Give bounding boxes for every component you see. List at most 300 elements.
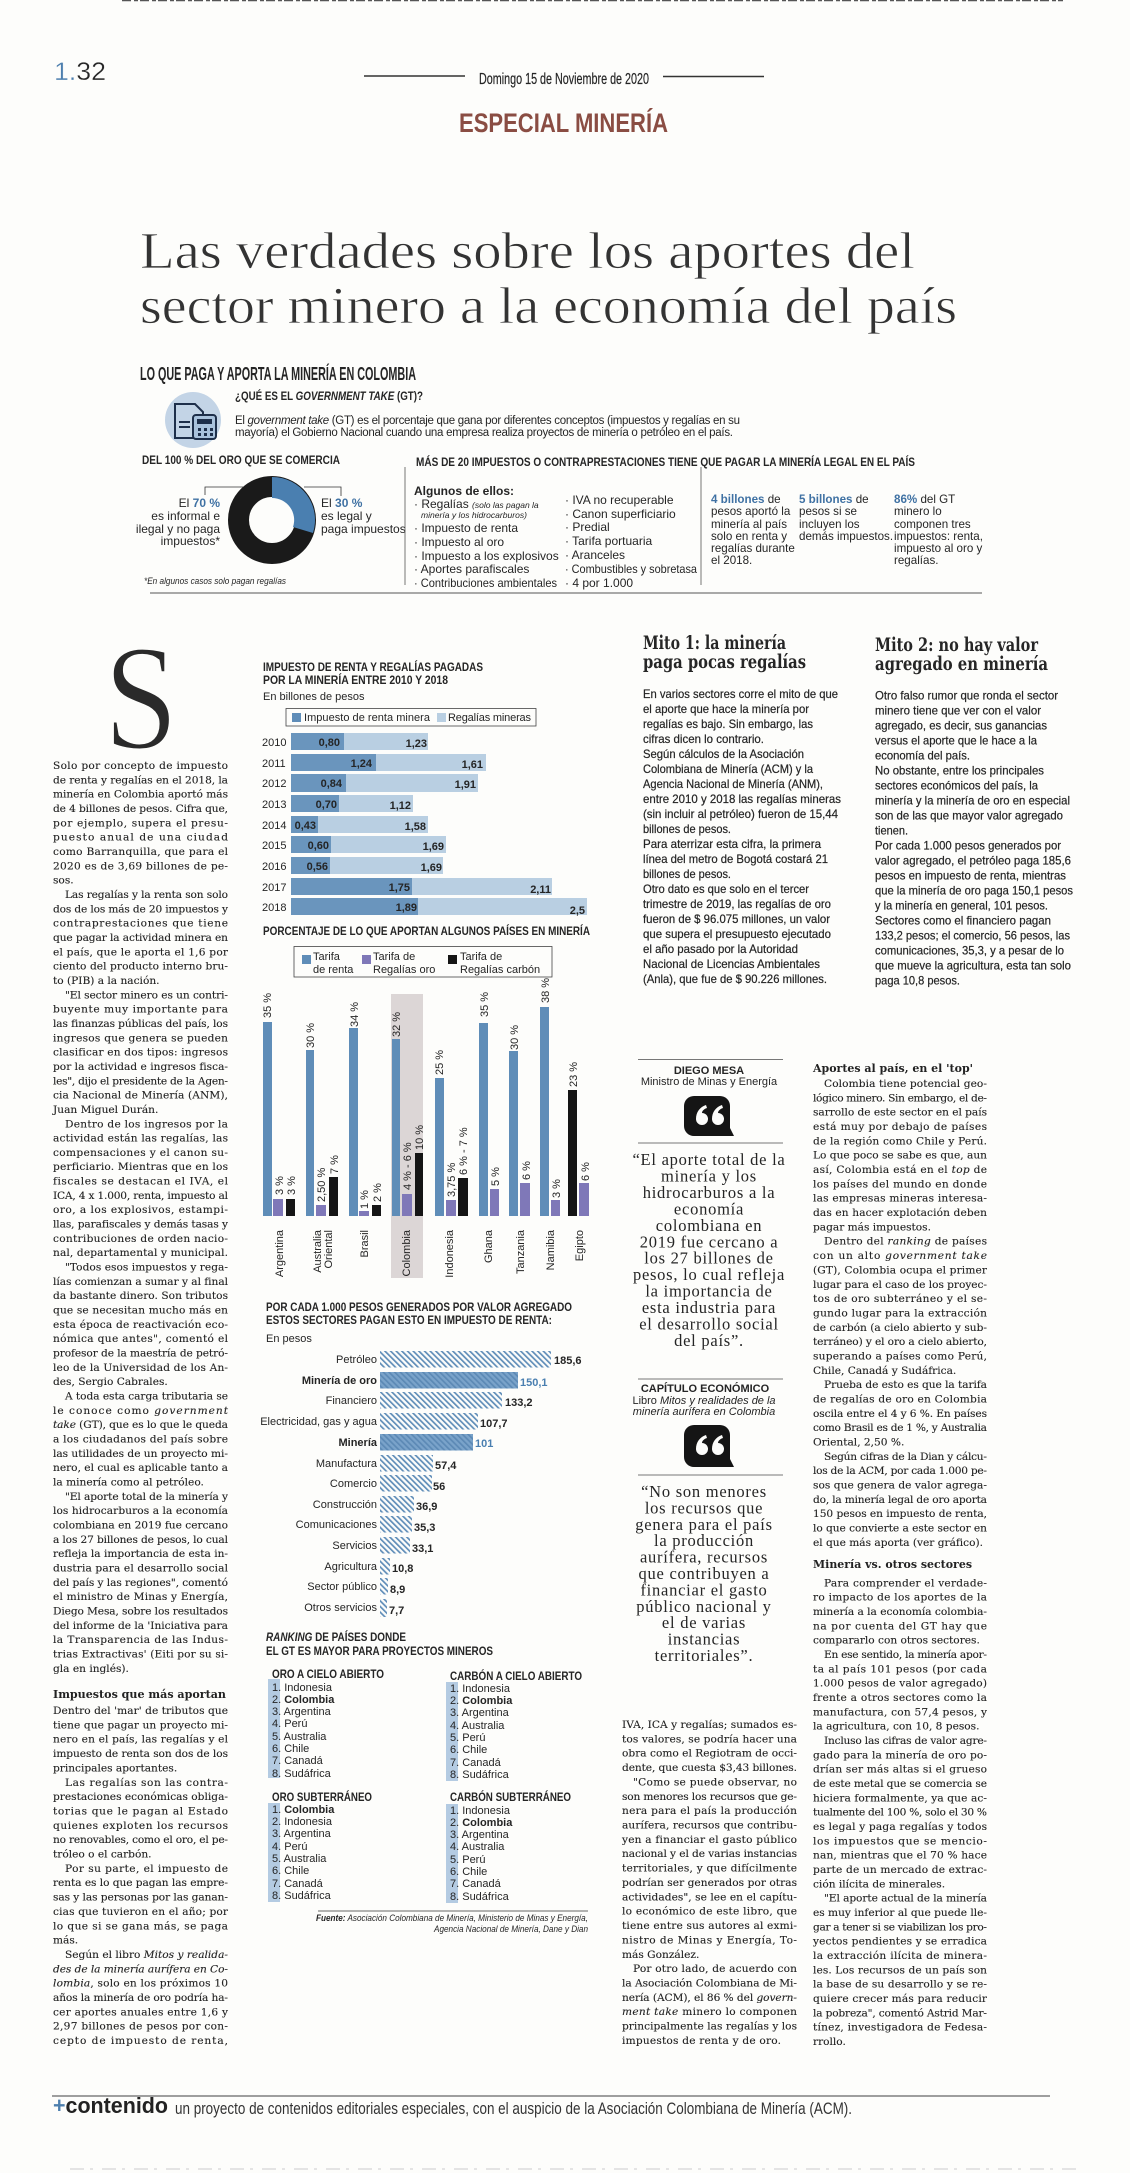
key figures: solo en renta y: [711, 530, 787, 543]
country labels: Indonesia: [444, 1229, 456, 1278]
key figures: minero lo: [894, 505, 942, 518]
article column 1: trias Extractivas' (Eiti por su si-: [53, 1648, 228, 1660]
legend: Regalías mineras: [448, 712, 532, 724]
country labels: [274, 1229, 586, 1278]
article column 4: quiere crecer más para reducir: [813, 1993, 988, 2005]
panel: myth 1: billones de pesos.: [643, 867, 731, 881]
article column 3: aurífera, recursos que contribu-: [622, 1820, 797, 1832]
bars by year: 2013: [262, 799, 286, 811]
panel: myth 1: cifras dicen lo contrario.: [643, 732, 764, 746]
article column 1: nal, departamental y municipal.: [53, 1247, 228, 1259]
article column 1: 2,97 billones de pesos por con-: [53, 2021, 228, 2033]
callout: quote by Diego Mesa: minería y los: [661, 1166, 757, 1186]
percentage labels: 30 %: [305, 1023, 317, 1048]
taxes list section: · Combustibles y sobretasa: [565, 562, 697, 576]
panel: myth 2: Otro falso rumor que ronda el sector: [875, 688, 1058, 702]
key figures: regalías.: [894, 554, 938, 567]
article column 1: sos.: [53, 875, 74, 887]
bars by year: 1,23: [406, 738, 427, 750]
legend: Impuesto de renta minera: [304, 712, 431, 724]
bars by year: 0,70: [316, 799, 337, 811]
article column 1: Por su parte, el impuesto de: [65, 1863, 228, 1875]
percentage labels: 3 %: [274, 1176, 286, 1195]
panel: myth 1: En varios sectores corre el mito de que: [643, 687, 838, 701]
panel: myth 1: fueron de $ 96.075 millones, un valor: [643, 912, 830, 926]
article column 1: dos de los más de 20 impuestos y: [53, 903, 228, 915]
sector labels and values: 33,1: [412, 1543, 433, 1555]
ranking: underground coal: 3. Argentina: [450, 1829, 510, 1841]
article column 3: tiene entre sus autores al exmi-: [622, 1920, 797, 1932]
panel: myth 1: línea del metro de Bogotá costará 21: [643, 852, 828, 866]
article column 3: tos valores, se podría hacer una: [622, 1733, 798, 1745]
taxes list section: · IVA no recuperable: [565, 493, 674, 507]
bars by year: 2015: [262, 840, 286, 852]
ranking: open-pit coal: 3. Argentina: [450, 1707, 510, 1719]
percentage labels: 32 %: [391, 1012, 403, 1037]
article column 4: sos que genera de valor agrega-: [813, 1480, 987, 1492]
panel: myth 2: minero tiene que ver con el valor: [875, 703, 1041, 717]
article column 1: clasificar en dos tipos: ingresos: [53, 1047, 228, 1059]
icon: quotation bubble: [684, 1425, 734, 1467]
key figures: componen tres: [894, 518, 971, 531]
callout: quote from economic chapter: la producción: [654, 1531, 754, 1550]
footer: sponsor line: +contenido: [53, 2093, 168, 2118]
ranking: underground gold: 1. Colombia: [272, 1804, 335, 1816]
icon: quotation bubble: [684, 1096, 734, 1136]
callout: quote by Diego Mesa: del país”.: [674, 1331, 744, 1350]
percentage labels: 3 %: [286, 1176, 298, 1195]
panel: myth 1: (sin incluir al petróleo) fueron de 15,44: [643, 807, 838, 821]
ranking: open-pit gold: 7. Canadá: [272, 1755, 324, 1767]
article column 4: superando a países como Perú,: [813, 1350, 987, 1362]
title: [140, 223, 957, 335]
article column 4: manufactura, con 57,4 pesos, y: [813, 1706, 987, 1718]
taxes list section: [405, 454, 915, 590]
panel: myth 1: Nacional de Licencias Ambientales: [643, 957, 820, 971]
ranking: open-pit coal: 8. Sudáfrica: [450, 1769, 510, 1781]
article column 1: que pagar la actividad minera en: [53, 932, 228, 944]
ranking: open-pit coal: 5. Perú: [450, 1732, 485, 1744]
article column 1: Dentro del 'mar' de tributos que: [53, 1705, 228, 1717]
article column 4: la base de su desarrollo y se re-: [813, 1979, 987, 1991]
sector labels and values: 56: [433, 1481, 445, 1493]
panel: myth 2: paga 10,8 pesos.: [875, 973, 960, 987]
callout: quote from economic chapter: los recursos que: [645, 1498, 763, 1517]
panel: myth 2: versus el aporte que le hace a la: [875, 733, 1037, 747]
article column 1: lías comienzan a sumar y al final: [53, 1276, 229, 1288]
article column 3: actividades", se lee en el capítu-: [622, 1891, 797, 1903]
ranking: open-pit coal: 6. Chile: [450, 1744, 487, 1756]
percentage labels: 1 %: [359, 1190, 371, 1209]
panel: myth 2: No obstante, entre los principales: [875, 763, 1044, 777]
callout: quote from economic chapter: el de varias: [662, 1613, 746, 1632]
percentage labels: 25 %: [434, 1050, 446, 1075]
panel: myth 2: que mueve la agricultura, esta tan solo: [875, 958, 1071, 972]
article column 4: Lo que poco se sabe es que, aun: [813, 1150, 987, 1162]
article column 1: ICA, 4 x 1.000, renta, impuesto al: [53, 1190, 229, 1202]
article column 3: impuestos de renta y de oro.: [622, 2035, 781, 2047]
panel: myth 2: pesos en impuesto de renta, mientras: [875, 868, 1066, 882]
article column 1: ingresos que genera se pueden: [53, 1032, 228, 1044]
panel: percentage by country chart: [262, 923, 592, 1278]
article column 4: frente a otros sectores como la: [813, 1692, 988, 1704]
article column 1: del país y las regiones", comentó: [53, 1577, 228, 1589]
sector labels and values: 185,6: [554, 1355, 582, 1367]
panel: myth 1: Otro dato es que solo en el tercer: [643, 882, 809, 896]
bars by year: 1,24: [351, 758, 373, 770]
article column 1: leo de la Universidad de los An-: [53, 1362, 228, 1374]
article column 4: yectos pendientes y se erradica: [812, 1936, 988, 1948]
title: sector minero a la economía del país: [140, 278, 957, 335]
legend: [286, 708, 536, 726]
panel: ranking of countries: EL GT ES MAYOR PARA PROYECTOS MINEROS: [266, 1644, 493, 1658]
ranking: underground gold: 5. Australia: [272, 1853, 327, 1865]
article column 4: las empresas mineras interesa-: [813, 1193, 987, 1205]
taxes list section: · Regalías (solo las pagan la: [414, 497, 539, 511]
bars by year: 2018: [262, 902, 286, 914]
callout: quote by Diego Mesa: pesos, lo cual refleja: [633, 1265, 785, 1284]
ranking: underground gold: ORO SUBTERRÁNEO: [272, 1789, 372, 1804]
page number: 1.32: [54, 58, 106, 86]
article column 4: es legal y paga regalías y todos: [813, 1821, 987, 1833]
sector labels and values: 150,1: [520, 1377, 548, 1389]
panel: myth 1: Para aterrizar esta cifra, la primera: [643, 837, 821, 851]
title: Las verdades sobre los aportes del: [140, 223, 915, 280]
article column 1: lo que si se gana más, se paga: [53, 1920, 229, 1932]
article column 1: to (PIB) a la nación.: [53, 975, 160, 987]
panel: income tax and royalties bar chart: En billones de pesos: [263, 691, 365, 703]
key figures: el 2018.: [711, 554, 752, 567]
country labels: Egipto: [574, 1230, 586, 1261]
panel: income tax per 1000 pesos of value added: En pesos: [266, 1333, 312, 1345]
Colombia highlight: [391, 994, 423, 1278]
taxes list section: · Canon superficiario: [565, 507, 676, 521]
article column 4: Dentro del ranking de países: [824, 1236, 987, 1248]
article column 1: "Todos esos impuestos y rega-: [65, 1262, 228, 1274]
sector labels and values: Petróleo: [336, 1354, 377, 1366]
panel: myth 2: economía del país.: [875, 748, 970, 762]
article column 3: lo económico de este libro, que: [622, 1906, 797, 1918]
bars by year: 2011: [262, 758, 286, 770]
sector labels and values: Electricidad, gas y agua: [260, 1416, 378, 1428]
drop cap: S: [104, 615, 178, 781]
callout: quote by Diego Mesa: los 27 billones de: [644, 1249, 774, 1268]
article column 3: ment take minero lo componen: [622, 2006, 797, 2018]
article column 4: parte de un mercado de extrac-: [813, 1864, 987, 1876]
percentage labels: 23 %: [568, 1062, 580, 1087]
sector labels and values: [260, 1354, 582, 1617]
key figures: minería al país: [711, 518, 787, 531]
article column 1: torias que le pagan al Estado: [53, 1806, 228, 1818]
panel: myth 2: son de las que mayor valor agregado: [875, 808, 1063, 822]
article column 1: prestaciones económicas obliga-: [53, 1791, 228, 1803]
panel: myth 2: [875, 634, 1073, 987]
percentage labels: 4 % - 6 %: [402, 1142, 414, 1190]
article column 1: cias que tuvieron en el año; por: [53, 1906, 229, 1918]
article column 1: colombiana en 2019 fue cercano: [53, 1520, 228, 1532]
article column 4: [812, 1061, 988, 2048]
panel: myth 2: que la minería de oro paga 150,1 pesos: [875, 883, 1073, 897]
bars by year: 1,12: [390, 800, 411, 812]
bars by year: 2017: [262, 882, 286, 894]
article column 4: con un alto government take: [813, 1250, 987, 1262]
article column 4: les. Los recursos de un país son: [813, 1964, 987, 1976]
sector labels and values: Construcción: [313, 1499, 377, 1511]
article column 4: "El aporte actual de la minería: [824, 1893, 988, 1905]
callout: quote by Diego Mesa: “El aporte total de la: [632, 1150, 786, 1169]
bars by year: 1,61: [462, 759, 483, 771]
percentage labels: 3 %: [551, 1179, 563, 1198]
panel: income tax and royalties bar chart: POR LA MINERÍA ENTRE 2010 Y 2018: [263, 672, 448, 687]
subheading: mining vs other sectors: Minería vs. otros sectores: [813, 1557, 972, 1571]
key figures: impuestos: renta,: [894, 530, 983, 543]
article column 1: puesto anual de una ciudad: [53, 832, 228, 844]
percentage labels: 6 % - 7 %: [458, 1127, 470, 1175]
article column 1: nero, el cual es aplicable tanto a: [53, 1462, 229, 1474]
ranking: underground coal: 2. Colombia: [450, 1817, 513, 1829]
article column 4: los impuestos que se mencio-: [813, 1835, 987, 1847]
panel: myth 2: sectores económicos del país, la: [875, 778, 1038, 792]
government take definition: El government take (GT) es el porcentaje que gana por diferentes conceptos (impuestos y regalías en su: [235, 415, 740, 427]
article column 4: (GT), Colombia ocupa el primer: [813, 1264, 988, 1276]
panel: ranking of countries: RANKING DE PAÍSES DONDE: [266, 1629, 406, 1644]
source note: Agencia Nacional de Minería, Dane y Dian: [433, 1924, 588, 1935]
article column 1: esta época de reactivación eco-: [53, 1319, 228, 1331]
percentage labels: 3,75 %: [446, 1163, 458, 1197]
ranking: underground gold: 3. Argentina: [272, 1828, 332, 1840]
article column 3: nería (ACM), el 86 % del govern-: [622, 1992, 797, 2004]
article column 4: lugar para el caso de los proyec-: [813, 1279, 987, 1291]
bars by year: 2012: [262, 778, 286, 790]
article column 4: nan, mientras que el 70 % hace: [813, 1850, 987, 1862]
callout: quote from economic chapter: [632, 1379, 783, 1665]
legend: Regalías carbón: [460, 964, 540, 976]
article column 4: los países del mundo en donde: [813, 1178, 987, 1190]
article column 1: minería en Colombia aportó más: [53, 789, 228, 801]
panel: myth 2: y la minería en general, 101 pesos.: [875, 898, 1048, 912]
article column 4: de la región como Chile y Perú.: [813, 1135, 987, 1147]
article column 1: 2020 es de 3,69 billones de pe-: [53, 860, 228, 872]
gold donut section: DEL 100 % DEL ORO QUE SE COMERCIA: [142, 453, 340, 467]
article column 1: "El sector minero es un contri-: [65, 989, 228, 1001]
taxes list section: · Impuesto al oro: [414, 535, 504, 549]
article column 4: minería a la economía colombia-: [813, 1606, 987, 1618]
country labels: Namibia: [545, 1229, 557, 1270]
key figures: pesos aportó la: [711, 505, 791, 518]
callout: quote from economic chapter: “No son menores: [641, 1482, 767, 1501]
gold donut section: El 70 %: [179, 496, 220, 510]
article column 1: de renta y regalías en el 2018, la: [53, 774, 229, 786]
percentage labels: 35 %: [479, 992, 491, 1017]
panel: myth 2: minería y la minería de oro en especial: [875, 793, 1070, 807]
key figures: 5 billones de: [799, 493, 869, 506]
article column 4: rrollo.: [813, 2036, 846, 2048]
taxes list section: · Contribuciones ambientales: [414, 576, 557, 590]
legend: [294, 946, 552, 977]
ranking: underground coal: 7. Canadá: [450, 1878, 502, 1890]
article column 1: dustria para el desarrollo social: [53, 1562, 229, 1574]
article column 1: de 4 billones de pesos. Cifra que,: [53, 803, 228, 815]
article column 1: las finanzas públicas del país, los: [53, 1018, 228, 1030]
article column 1: nómica que antes", comentó el: [53, 1333, 229, 1345]
article column 4: Colombia tiene potencial geo-: [824, 1078, 987, 1090]
panel: percentage by country chart: PORCENTAJE DE LO QUE APORTAN ALGUNOS PAÍSES EN MINERÍA: [263, 923, 590, 938]
country labels: Argentina: [274, 1229, 286, 1277]
callout: quote from economic chapter: CAPÍTULO ECONÓMICO: [641, 1382, 770, 1395]
panel: myth 1: paga pocas regalías: [643, 651, 806, 673]
taxes list section: minería y los hidrocarburos): [421, 510, 527, 520]
panel: income tax per 1000 pesos of value added: POR CADA 1.000 PESOS GENERADOS POR VALOR AGREGADO: [266, 1300, 572, 1314]
article column 1: actividad están las regalías, las: [53, 1133, 228, 1145]
article column 4: ta al país 101 pesos (por cada: [813, 1663, 988, 1675]
article column 4: lógico minero. Sin embargo, el de-: [813, 1092, 987, 1104]
ranking: open-pit coal: 4. Australia: [450, 1720, 505, 1732]
gold donut section: ilegal y no paga: [136, 522, 220, 536]
article column 4: la agricultura, con 10, 8 pesos.: [813, 1721, 979, 1733]
bars by year: 0,56: [307, 861, 328, 873]
article column 1: cia Nacional de Minería (ANM),: [53, 1090, 228, 1102]
bars by year: 1,91: [455, 779, 476, 791]
callout: quote from economic chapter: financiar el gasto: [640, 1580, 768, 1599]
taxes list section: · Impuesto de renta: [414, 521, 518, 535]
percentage labels: 7 %: [329, 1155, 341, 1174]
sector labels and values: 57,4: [435, 1460, 457, 1472]
article column 3: territoriales, y que difícilmente: [622, 1863, 797, 1875]
sector labels and values: Agricultura: [324, 1561, 378, 1573]
panel: myth 1: Mito 1: la minería: [643, 632, 786, 654]
callout: quote from economic chapter: público nacional y: [636, 1597, 772, 1616]
bars by year: 1,69: [421, 862, 442, 874]
article column 1: contribuciones de orden nacio-: [53, 1233, 228, 1245]
article column 1: tróleo o el carbón.: [53, 1848, 152, 1860]
ranking: open-pit coal: CARBÓN A CIELO ABIERTO: [450, 1668, 582, 1683]
panel: myth 2: Sectores como el financiero pagan: [875, 913, 1051, 927]
article column 1: [52, 760, 229, 2047]
panel: income tax per 1000 pesos of value added: ESTOS SECTORES PAGAN ESTO EN IMPUESTO DE RENTA:: [266, 1313, 552, 1327]
bars by year: 2016: [262, 861, 286, 873]
article column 3: son menores los recursos que ge-: [622, 1791, 797, 1803]
ranking: underground coal: CARBÓN SUBTERRÁNEO: [450, 1789, 571, 1804]
article column 1: fiscales se destacan el IVA, el: [53, 1176, 229, 1188]
bars by year: 0,60: [308, 840, 329, 852]
key figures: 4 billones de: [711, 493, 781, 506]
country labels: Australia: [312, 1229, 324, 1273]
article column 1: renta es lo que pagan las empre-: [53, 1877, 228, 1889]
bars by year: 0,80: [319, 737, 340, 749]
article column 1: por la actividad e ingresos fisca-: [53, 1061, 228, 1073]
callout: quote from economic chapter: minería aurífera en Colombia: [633, 1406, 775, 1418]
panel: myth 1: trimestre de 2019, las regalías de oro: [643, 897, 831, 911]
gold donut section: *En algunos casos solo pagan regalías: [144, 576, 286, 587]
article column 3: nacional y el de varias instancias: [622, 1848, 797, 1860]
article column 1: le conoce como government: [53, 1405, 229, 1417]
panel: myth 1: el aporte que hace la minería por: [643, 702, 809, 716]
subheading: taxes that contribute most: Impuestos que más aportan: [53, 1687, 227, 1701]
source note: Fuente: Asociación Colombiana de Minería, Ministerio de Minas y Energía,: [316, 1913, 588, 1924]
article column 1: oro, a los explosivos, estampi-: [53, 1204, 228, 1216]
sector labels and values: 133,2: [505, 1397, 533, 1409]
ranking: open-pit gold: 6. Chile: [272, 1743, 309, 1755]
article column 3: [621, 1719, 798, 2047]
sector labels and values: Manufactura: [316, 1458, 378, 1470]
article column 4: la extracción ilícita de minera-: [813, 1950, 987, 1962]
panel: myth 1: regalías es bajo. Sin embargo, las: [643, 717, 813, 731]
percentage labels: 2,50 %: [316, 1168, 328, 1202]
article column 1: sas y las personas por las ganan-: [53, 1892, 228, 1904]
article column 1: quienes exploten los recursos: [53, 1820, 228, 1832]
ranking: underground gold: 8. Sudáfrica: [272, 1890, 332, 1902]
taxes list section: · 4 por 1.000: [565, 576, 633, 590]
article column 1: gla en inglés).: [53, 1663, 129, 1675]
article column 1: take (GT), que es lo que le queda: [53, 1419, 229, 1431]
article column 1: por ejemplo, supera el presu-: [53, 817, 228, 829]
section label: ESPECIAL MINERÍA: [459, 107, 668, 138]
article column 1: contraprestaciones que tiene: [53, 918, 228, 930]
percentage labels: 6 %: [580, 1162, 592, 1181]
article column 1: buyente muy importante para: [53, 1004, 229, 1016]
bars by year: 1,89: [396, 902, 417, 914]
taxes list section: · Tarifa portuaria: [565, 534, 652, 548]
callout: quote from economic chapter: instancias: [668, 1630, 740, 1649]
article column 4: como Brasil es de 1 %, y Australia: [813, 1422, 988, 1434]
percentage labels: 2 %: [372, 1183, 384, 1202]
ranking: open-pit gold: [268, 1667, 384, 1780]
sector labels and values: Financiero: [326, 1395, 377, 1407]
gold donut section: paga impuestos: [321, 522, 406, 536]
key figures: regalías durante: [711, 542, 795, 555]
article column 1: Dentro de los ingresos por la: [65, 1118, 229, 1130]
legend: Tarifa de: [460, 951, 502, 963]
article column 3: la Asociación Colombiana de Mi-: [622, 1978, 797, 1990]
ranking: open-pit coal: 1. Indonesia: [450, 1683, 511, 1695]
article column 1: más.: [53, 1935, 78, 1947]
article column 1: des de la minería aurífera en Co-: [53, 1963, 228, 1975]
panel: income tax and royalties bar chart: IMPUESTO DE RENTA Y REGALÍAS PAGADAS: [263, 659, 483, 674]
panel: myth 2: agregado, es decir, sus ganancias: [875, 718, 1047, 732]
taxes list section: Algunos de ellos:: [414, 484, 514, 498]
sector labels and values: 107,7: [480, 1418, 508, 1430]
article column 4: es muy inferior al que puede lle-: [813, 1907, 987, 1919]
callout: quote by Diego Mesa: el desarrollo social: [639, 1314, 779, 1334]
article column 4: la pobreza", comentó Astrid Mar-: [813, 2007, 987, 2019]
article column 3: yen a financiar el gasto público: [621, 1834, 797, 1846]
bars by year: 2,5: [570, 905, 585, 917]
article column 1: Juan Miguel Durán.: [52, 1104, 158, 1116]
article column 1: lombia, solo en los próximos 10: [53, 1978, 228, 1990]
article column 1: del informe de la 'Iniciativa para: [53, 1620, 229, 1632]
article column 4: oscila entre el 4 y 6 %. En países: [813, 1408, 987, 1420]
article column 4: tos de oro subterráneo y el se-: [813, 1293, 987, 1305]
ranking: underground gold: 6. Chile: [272, 1865, 309, 1877]
icon: document and calculator: [165, 392, 221, 448]
callout: quote from economic chapter: Libro Mitos y realidades de la: [632, 1395, 776, 1407]
callout: quote by Diego Mesa: esta industria para: [642, 1298, 776, 1317]
taxes list section: · Predial: [565, 520, 610, 534]
article column 4: Incluso las cifras de valor agre-: [824, 1735, 987, 1747]
ranking: open-pit gold: ORO A CIELO ABIERTO: [272, 1667, 384, 1681]
article column 1: tiene que pagar un proyecto mi-: [53, 1719, 228, 1731]
panel: myth 2: valor agregado, el petróleo paga 185,6: [875, 853, 1071, 867]
article column 4: tualmente del 100 %, solo el 30 %: [813, 1807, 987, 1819]
bars by year: 1,58: [405, 821, 426, 833]
article column 4: Para comprender el verdade-: [824, 1577, 987, 1589]
panel: myth 1: entre 2010 y 2018 las regalías mineras: [643, 792, 841, 806]
article column 4: gar a tener si se viabilizan los pro-: [813, 1921, 987, 1933]
country labels: Colombia: [401, 1229, 413, 1276]
panel: myth 2: 133,2 pesos; el comercio, 56 pesos, las: [875, 928, 1070, 942]
gold donut section: es informal e: [151, 509, 220, 523]
date line: Domingo 15 de Noviembre de 2020: [479, 71, 649, 88]
